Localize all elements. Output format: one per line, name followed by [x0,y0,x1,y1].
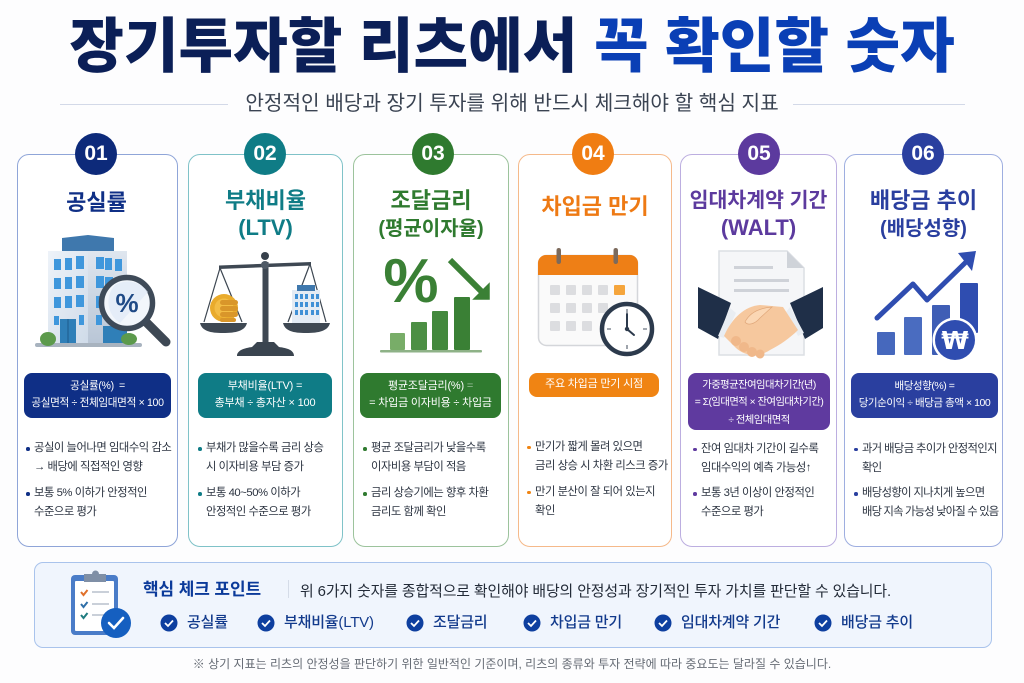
formula box: 공실률(%) = [70,380,125,392]
panel: 차입금 만기 [518,133,672,547]
icon: calendar with clock [538,248,654,356]
formula box: 총부채 ÷ 총자산 × 100 [215,397,315,409]
bullet text: 배당 지속 가능성 낮아질 수 있음 [862,506,998,518]
panel: 부채비율 [188,133,343,547]
heading: 임대차계약 기간 (WALT): (WALT) [721,215,796,240]
bullet text: 확인 [862,462,882,474]
panel: 핵심 체크 포인트 [34,562,992,648]
formula box: 당기순이익 ÷ 배당금 총액 × 100 [859,397,990,409]
bullet text [854,486,999,518]
bullet text: 배당성향이 지나치게 높으면 [862,487,985,499]
bullet text [198,486,311,518]
checklist: 조달금리 [433,614,487,631]
bullet text: 보통 3년 이상이 안정적인 [701,487,814,499]
checklist: 임대차계약 기간 [681,614,780,631]
icon: percent with falling arrow and bars: % [383,247,439,316]
heading: 조달금리 (평균이자율) [378,188,484,240]
formula box: = Σ(임대면적 × 잔여임대차기간) [695,397,823,408]
bullet text: 부채가 많을수록 금리 상승 [206,442,323,454]
heading: 배당금 추이 (배당성향): 배당금 추이 [870,188,977,213]
number badge 01 [75,133,117,175]
bullet text [693,486,814,518]
formula box [360,373,501,418]
bullet text: 잔여 임대차 기간이 길수록 [701,442,818,454]
bullet text: 과거 배당금 추이가 안정적인지 [862,442,997,454]
icon: percent with falling arrow and bars [380,247,490,352]
number badge 04: 04 [581,142,605,165]
number badge 06 [902,133,944,175]
icon: rising chart with won coin [874,251,978,360]
heading: 부채비율 (LTV): (LTV) [238,215,293,240]
bullet text: 시 이자비용 부담 증가 [206,461,304,473]
bullet text: 보통 40~50% 이하가 [206,487,300,499]
bullet text: 평균 조달금리가 낮을수록 [371,442,486,454]
panel: 조달금리 [353,133,509,547]
bullet text: 확인 [535,504,555,516]
number badge 02 [244,133,286,175]
heading: 핵심 체크 포인트: 핵심 체크 포인트 [143,580,261,599]
checklist: 공실률 [187,614,228,631]
bullet text: 수준으로 평가 [701,506,763,518]
bullet text: 금리 상승 시 차환 리스크 증가 [535,460,668,472]
bullet text [363,441,486,473]
formula box [688,373,830,430]
formula box: 배당성향(%) = [895,380,954,392]
bullet text: 공실이 늘어나면 임대수익 감소 [34,442,171,454]
icon: building with magnifier [35,235,170,347]
bullet text: 임대수익의 예측 가능성↑ [701,462,811,474]
number badge 03 [412,133,454,175]
heading: 배당금 추이 (배당성향): (배당성향) [880,218,967,240]
number badge 06: 06 [911,142,935,165]
bullet text: 보통 5% 이하가 안정적인 [34,487,147,499]
bullet text [527,440,668,472]
formula box: 가중평균잔여임대차기간(년) [702,380,816,390]
bullet text [198,441,324,473]
icon: balance scale with coins and building [200,252,330,356]
bullet text: 금리 상승기에는 향후 차환 [371,487,488,499]
number badge 05 [738,133,780,175]
number badge 01: 01 [84,142,108,165]
icon: building with magnifier: % [115,288,139,318]
formula box: 부채비율(LTV) = [228,380,302,392]
checklist: 배당금 추이 [841,614,913,631]
checklist [160,614,913,632]
heading: 배당금 추이 (배당성향) [870,188,977,240]
bullet text [527,485,655,516]
formula box: ÷ 전체임대면적 [728,414,790,426]
number badge 03: 03 [421,142,445,165]
title: 장기투자할 리츠에서 꼭 확인할 숫자 [69,13,955,80]
heading: 조달금리 (평균이자율): (평균이자율) [378,218,484,240]
heading: 차입금 만기: 차입금 만기 [541,194,649,219]
bullet text [363,486,488,518]
bullet text: 수준으로 평가 [34,506,96,518]
heading: 부채비율 (LTV): 부채비율 [225,188,306,213]
formula box [851,373,998,418]
heading: 임대차계약 기간 (WALT) [690,189,827,240]
formula box: 주요 차입금 만기 시점 [545,378,643,390]
checklist: 차입금 만기 [550,614,622,631]
formula box: 공실면적 ÷ 전체임대면적 × 100 [31,397,164,409]
number badge 05: 05 [747,142,771,165]
bullet text: 만기가 짧게 몰려 있으면 [535,440,642,452]
formula box: 평균조달금리(%) = [388,380,473,392]
icon: contract and handshake [698,250,823,358]
heading: 공실률: 공실률 [66,190,127,215]
formula box [198,373,332,418]
heading: 부채비율 (LTV) [225,188,306,240]
bullet text [26,486,147,518]
footnote: ※ 상기 지표는 리츠의 안정성을 판단하기 위한 일반적인 기준이며, 리츠의 종류와 투자 전략에 따라 중요도는 달라질 수 있습니다. [193,657,831,671]
bullet text: → 배당에 직접적인 영향 [34,461,142,473]
bullet text [854,442,997,474]
formula box [529,373,659,397]
formula box: = 차입금 이자비용 ÷ 차입금 [369,397,492,409]
number badge 04 [572,133,614,175]
number badge 02: 02 [253,142,277,165]
bullet text: 이자비용 부담이 적음 [371,461,466,473]
bullet text: 안정적인 수준으로 평가 [206,506,311,518]
panel: 임대차계약 기간 [680,133,837,547]
bullet text: 금리도 함께 확인 [371,506,446,518]
bullet text [26,441,172,473]
icon: clipboard checklist [71,570,131,638]
summary text: 위 6가지 숫자를 종합적으로 확인해야 배당의 안정성과 장기적인 투자 가치를 판단할 수 있습니다. [300,584,891,600]
heading: 조달금리 (평균이자율): 조달금리 [391,188,471,213]
formula box [24,373,171,418]
subtitle: 안정적인 배당과 장기 투자를 위해 반드시 체크해야 할 핵심 지표 [245,93,779,115]
panel: 배당금 추이 [844,133,1003,547]
bullet text: 만기 분산이 잘 되어 있는지 [535,486,655,498]
icon: rising chart with won coin: ₩ [941,326,969,355]
panel: 공실률 [17,133,178,547]
heading: 임대차계약 기간 (WALT): 임대차계약 기간 [690,189,827,212]
checklist: 부채비율(LTV) [284,614,374,631]
bullet text [693,442,818,474]
